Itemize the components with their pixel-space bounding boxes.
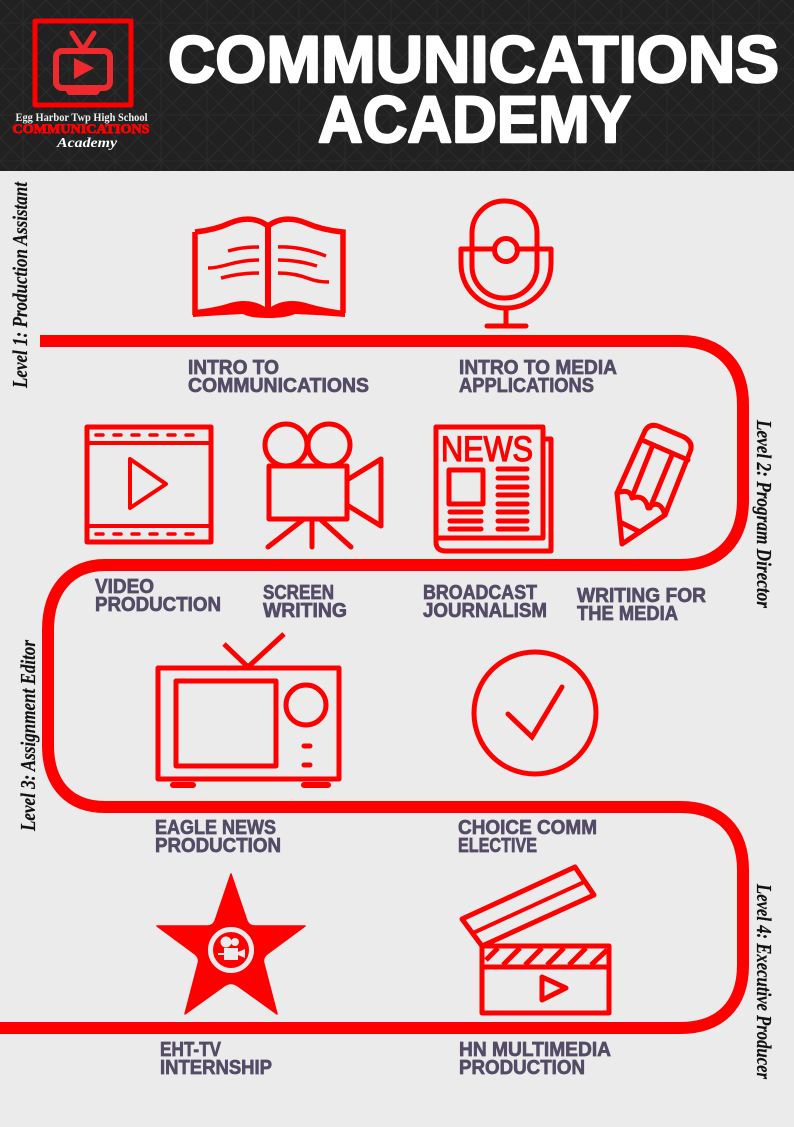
- text: screen writing: SCREEN: [263, 582, 334, 604]
- text: eagle news production: PRODUCTION: [155, 835, 281, 857]
- text: hn multimedia production: HN MULTIMEDIA: [459, 1039, 611, 1061]
- icon: clapperboard: [462, 867, 609, 1013]
- text: eht-tv internship: EHT-TV: [160, 1039, 222, 1061]
- icon: newspaper: [436, 427, 551, 551]
- header band: [0, 0, 794, 171]
- icon: movie camera: [265, 424, 381, 547]
- logo: [12, 21, 150, 151]
- text: eht-tv internship: INTERNSHIP: [160, 1057, 272, 1079]
- logo communications: COMMUNICATIONS: [12, 121, 150, 136]
- text: writing for the media: THE MEDIA: [577, 603, 678, 625]
- text: intro to media applications: INTRO TO MEDIA: [459, 357, 617, 379]
- title: COMMUNICATIONS: [168, 22, 779, 96]
- text: intro to media applications: APPLICATIONS: [459, 375, 594, 397]
- icon: check circle: [474, 652, 596, 774]
- icon: microphone: [461, 201, 551, 326]
- title: ACADEMY: [318, 82, 631, 156]
- text: video production: PRODUCTION: [95, 594, 221, 616]
- text: eagle news production: EAGLE NEWS: [155, 817, 276, 839]
- logo school name: Egg Harbor Twp High School: [16, 112, 148, 124]
- level 1 label: Level 1: Production Assistant: [8, 181, 32, 389]
- text: broadcast journalism: BROADCAST: [423, 582, 537, 604]
- icon: television: [158, 634, 339, 785]
- level 4 label: Level 4: Executive Producer: [752, 883, 776, 1080]
- text: choice comm elective: ELECTIVE: [458, 835, 537, 857]
- icon: newspaper headline: NEWS: [441, 430, 533, 469]
- level 2 label: Level 2: Program Director: [752, 419, 776, 609]
- text: writing for the media: WRITING FOR: [577, 585, 707, 607]
- text: hn multimedia production: PRODUCTION: [459, 1057, 585, 1079]
- logo frame: [35, 21, 131, 105]
- red timeline path: [0, 341, 743, 1028]
- title: [168, 22, 779, 156]
- text: screen writing: WRITING: [263, 600, 347, 622]
- text: broadcast journalism: JOURNALISM: [423, 600, 547, 622]
- text: intro to communications: INTRO TO: [188, 357, 279, 379]
- logo academy: Academy: [56, 136, 118, 151]
- text: intro to communications: COMMUNICATIONS: [188, 375, 369, 397]
- level 3 label: Level 3: Assignment Editor: [16, 639, 40, 832]
- text: choice comm elective: CHOICE COMM: [458, 817, 597, 839]
- icon: star with camera: [157, 874, 305, 1014]
- icon: film strip: [87, 427, 211, 542]
- logo tv icon: [56, 33, 110, 94]
- icon: book: [193, 219, 345, 318]
- text: video production: VIDEO: [95, 576, 154, 598]
- icon: pencil: [617, 425, 691, 544]
